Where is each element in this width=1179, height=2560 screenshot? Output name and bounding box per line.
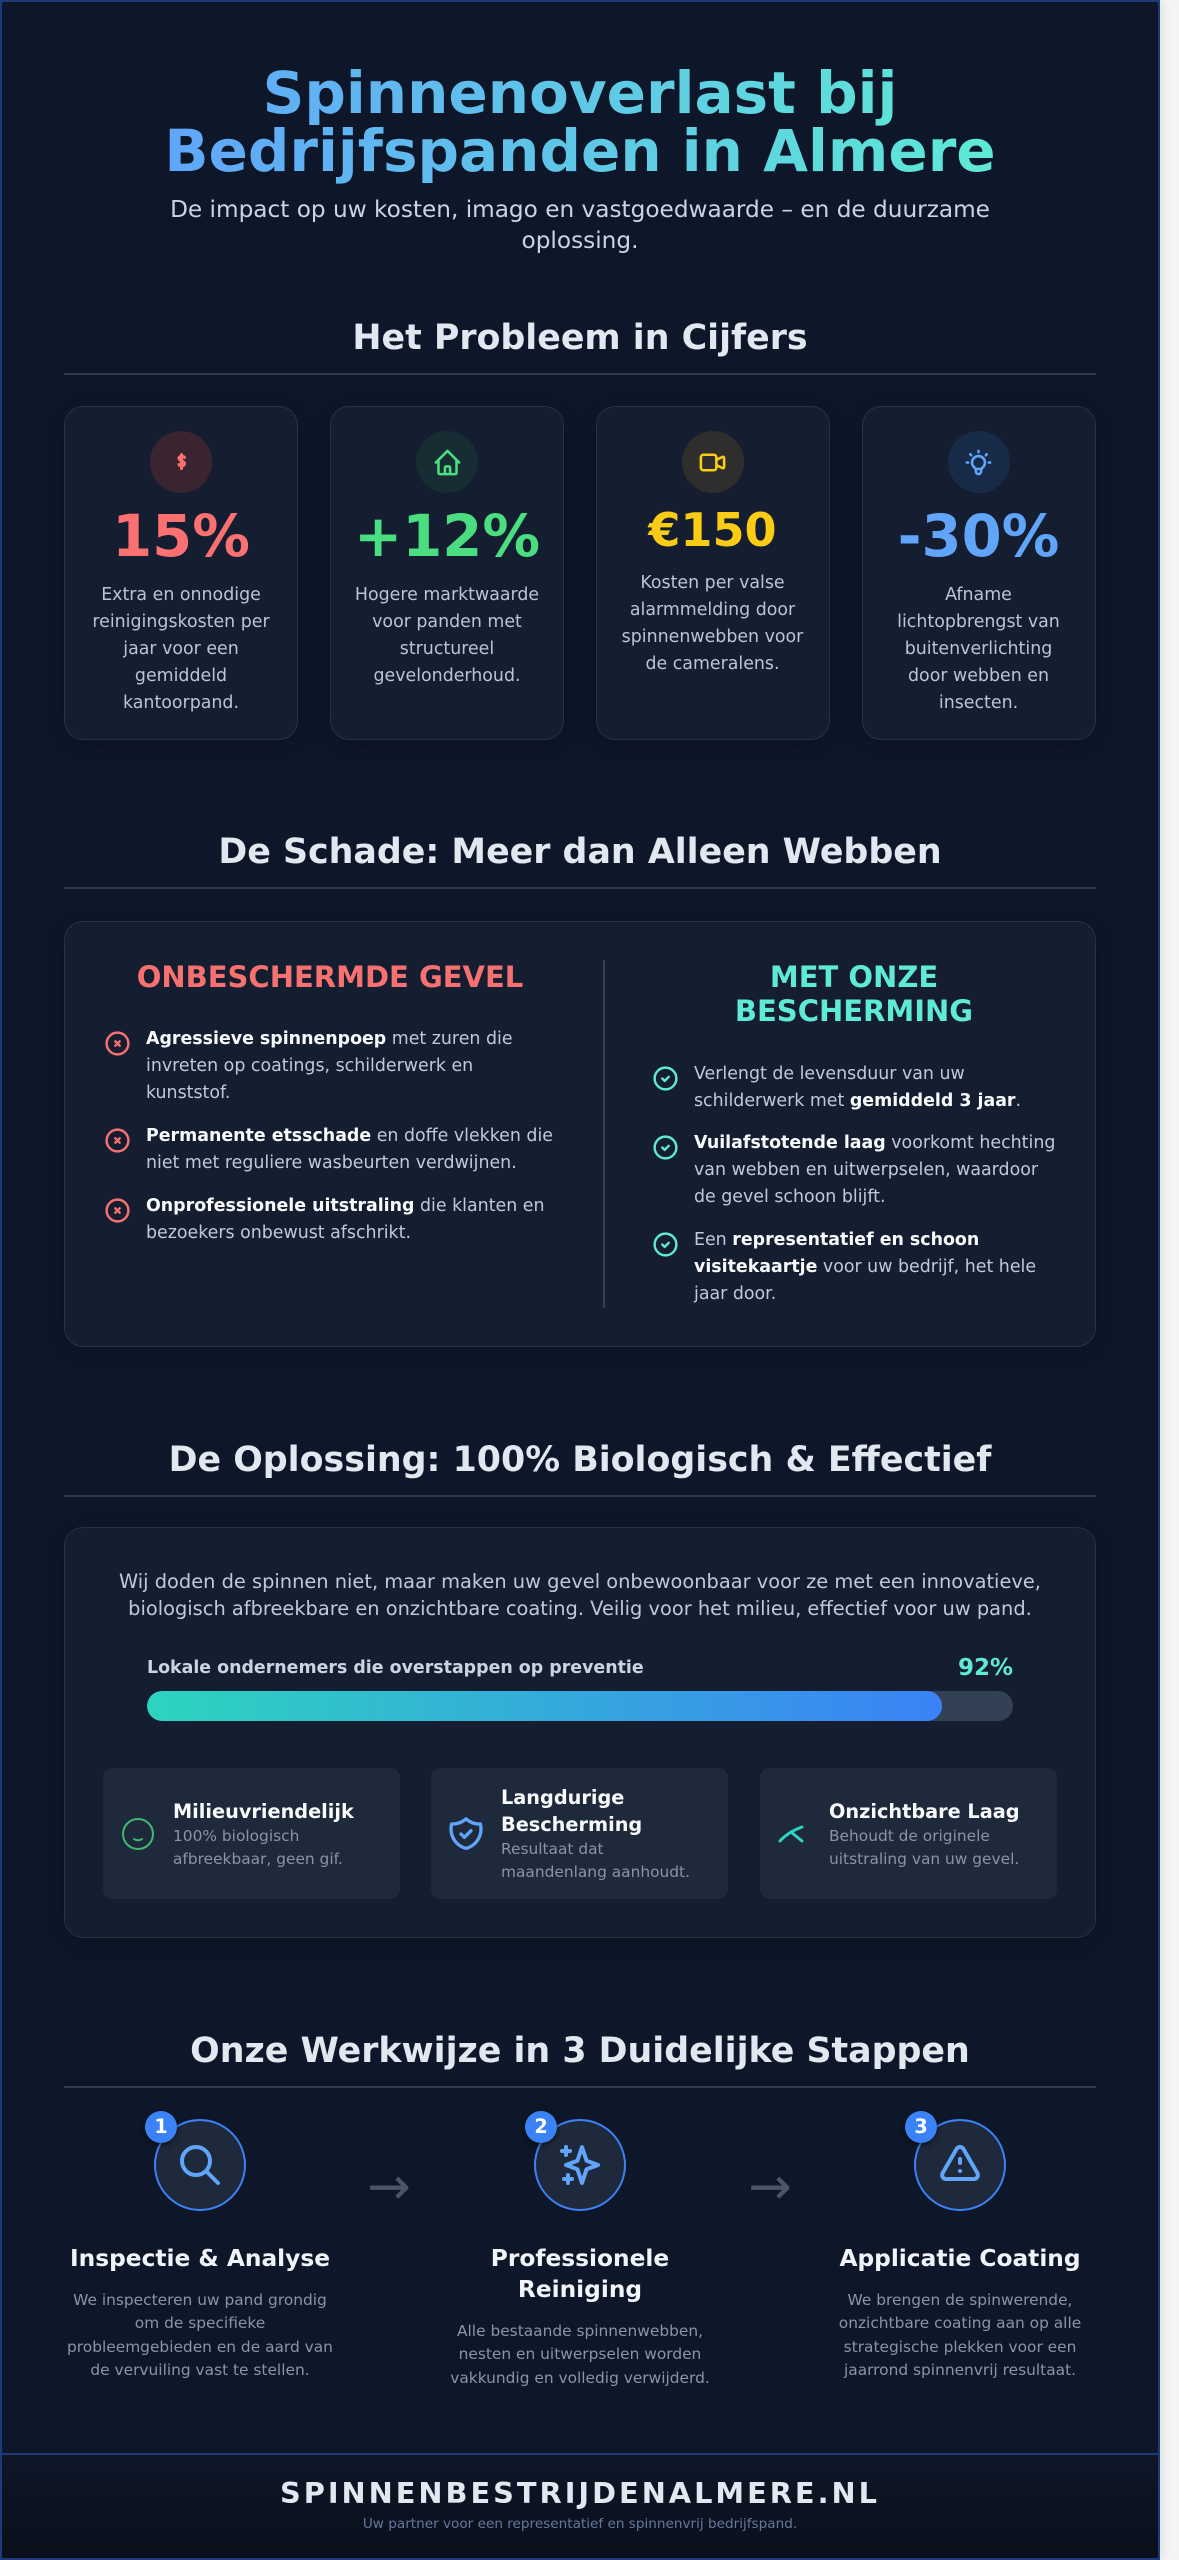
stat description: spinnenwebben voor [622,627,803,647]
step description: We brengen de spinwerende, [848,2291,1072,2309]
feature text: Langdurige [501,1786,624,1809]
subtitle: oplossing. [522,227,638,254]
stat description [355,585,539,686]
list item: visitekaartje: visitekaartje voor uw bedrijf, het hele [694,1257,1036,1277]
icon: home [416,431,478,493]
step description: vakkundig en volledig verwijderd. [450,2369,710,2387]
stat description [622,573,804,674]
list item: levensduur [653,1064,1021,1111]
intro text [119,1570,1041,1620]
stat description: Afname [945,585,1012,605]
icon: invisible layer [778,1826,804,1843]
stat description: gevelonderhoud. [373,666,521,686]
step number: 1 [154,2115,168,2138]
panel: stat card €150 [596,406,830,740]
stat description: voor panden met [372,612,522,632]
list item: uitstraling: Onprofessionele uitstraling die klanten en [146,1196,544,1216]
arrow: step 2 to 3: → [748,2157,792,2217]
feature text: afbreekbaar, geen gif. [173,1850,343,1868]
subtitle: De impact op uw kosten, imago en vastgoedwaarde – en de duurzame [170,196,990,223]
title: Spinnenoverlast bij [263,59,897,127]
step title: Applicatie Coating [839,2245,1081,2272]
step 2: reiniging [450,2111,710,2387]
list item: vuilafstotende laag: van webben en uitwerpselen, waardoor [694,1160,1038,1180]
progress value: 92% [958,1655,1013,1681]
step description: om de specifieke [135,2314,265,2332]
stat description: Hogere marktwaarde [355,585,539,605]
list item: vuilafstotende laag [653,1133,1055,1207]
feature text: Milieuvriendelijk [173,1800,354,1823]
progress track [147,1691,1013,1721]
list item: spinnenpoep: Agressieve spinnenpoep met zuren die [146,1029,513,1049]
stat description: insecten. [939,693,1018,713]
list item: etsschade: Permanente etsschade en doffe vlekken die [146,1126,553,1146]
step description [839,2291,1081,2379]
step description: nesten en uitwerpselen worden [459,2345,701,2363]
panel: stat card 15% [64,406,298,740]
stat description: de cameralens. [645,654,780,674]
footer brand: SPINNENBESTRIJDENALMERE.NL [280,2476,880,2510]
list item: levensduur: schilderwerk met gemiddeld 3 jaar. [694,1091,1021,1111]
intro text: Wij doden de spinnen niet, maar maken uw gevel onbewoonbaar voor ze met een innovatieve, [119,1570,1041,1593]
icon: shield [449,1817,483,1850]
list item: vuilafstotende laag: de gevel schoon blijft. [694,1187,886,1207]
list item: visitekaartje: Een representatief en schoon [694,1230,979,1250]
header: title and subtitle [164,59,996,254]
icon: dollar [150,431,212,493]
stat description: reinigingskosten per [92,612,270,632]
list item: visitekaartje: jaar door. [694,1284,776,1304]
feature text: Resultaat dat [501,1840,604,1858]
heading: De Oplossing: De Oplossing: 100% Biologisch & Effectief [169,1440,991,1480]
stat description: jaar voor een [123,639,239,659]
step title: Inspectie & Analyse [70,2245,330,2272]
footer [2,2453,1158,2558]
title: Bedrijfspanden in Almere [164,117,996,185]
step number: 2 [534,2115,548,2138]
icon: light bulb [948,431,1010,493]
list item: etsschade: niet met reguliere wasbeurten verdwijnen. [146,1153,517,1173]
stat description [897,585,1060,713]
stat number: +12% [354,503,540,570]
progress label: Lokale ondernemers die overstappen op preventie [147,1658,644,1678]
feature text: uitstraling van uw gevel. [829,1850,1019,1868]
stat description: Extra en onnodige [101,585,261,605]
column heading: met onze bescherming: MET ONZE [770,960,938,994]
step number: 3 [914,2115,928,2138]
heading: De Schade: De Schade: Meer dan Alleen Webben [218,832,942,872]
footer tagline: Uw partner voor een representatief en spinnenvrij bedrijfspand. [363,2516,797,2532]
step title: Reiniging [518,2276,642,2303]
step number [145,2111,177,2143]
feature text: Behoudt de originele [829,1827,990,1845]
step description: onzichtbare coating aan op alle [839,2314,1081,2332]
feature card: onzichtbare laag [760,1768,1057,1899]
step title: Professionele [491,2245,669,2272]
feature text: maandenlang aanhoudt. [501,1863,690,1881]
stat number: €150 [648,503,777,557]
panel: stat card -30% [862,406,1096,740]
list item: spinnenpoep: invreten op coatings, schilderwerk en [146,1056,473,1076]
column heading: met onze bescherming: BESCHERMING [735,994,973,1028]
step description: strategische plekken voor een [844,2338,1076,2356]
icon: sparkles [534,2119,626,2211]
step description: We inspecteren uw pand grondig [73,2291,327,2309]
stat description: door webben en [908,666,1049,686]
step description [450,2322,710,2387]
feature text [829,1800,1020,1868]
list item: levensduur: Verlengt de levensduur van uw [694,1064,965,1084]
title [160,64,1000,190]
list item: spinnenpoep [105,1029,513,1103]
list item: vuilafstotende laag: Vuilafstotende laag voorkomt hechting [694,1133,1055,1153]
step number [905,2111,937,2143]
progress fill [147,1691,942,1721]
heading: Onze Werkwijze: Onze Werkwijze in 3 Duidelijke Stappen [190,2031,970,2071]
panel: stat card +12% [330,406,564,740]
step description: de vervuiling vast te stellen. [90,2361,310,2379]
icon: search [154,2119,246,2211]
stat description: alarmmelding door [630,600,795,620]
stat description: kantoorpand. [123,693,239,713]
step number [525,2111,557,2143]
column heading: onbeschermde gevel: ONBESCHERMDE GEVEL [137,960,523,994]
feature text [173,1800,354,1868]
list item: uitstraling: bezoekers onbewust afschrikt. [146,1223,411,1243]
feature text: 100% biologisch [173,1827,299,1845]
panel: solution [64,1527,1096,1938]
stat number: 15% [112,503,250,570]
stat description: lichtopbrengst van [897,612,1060,632]
feature text: Onzichtbare Laag [829,1800,1020,1823]
step description: Alle bestaande spinnenwebben, [457,2322,703,2340]
panel: comparison [64,921,1096,1347]
stat description: buitenverlichting [905,639,1052,659]
subtitle [170,196,990,254]
step 1: inspectie [67,2111,333,2379]
icon: smile [122,1818,154,1850]
icon: video camera [682,431,744,493]
icon: warning triangle [914,2119,1006,2211]
heading: Het Probleem in Cijfers: Het Probleem in Cijfers [352,318,808,358]
stat number: -30% [898,503,1059,570]
list item: visitekaartje [653,1230,1036,1304]
stat description: Kosten per valse [640,573,785,593]
progress bar: 92% [147,1655,1013,1721]
arrow: step 1 to 2: → [367,2157,411,2217]
list item: etsschade [105,1126,553,1173]
stat description: gemiddeld [135,666,227,686]
step 3: coating [839,2111,1081,2379]
step description: probleemgebieden en de aard van [67,2338,333,2356]
feature text [501,1786,690,1881]
list item: uitstraling [105,1196,544,1243]
step description [67,2291,333,2379]
step description: jaarrond spinnenvrij resultaat. [844,2361,1076,2379]
feature text: Bescherming [501,1813,642,1836]
intro text: biologisch afbreekbare en onzichtbare coating. Veilig voor het milieu, effectief voor uw pand. [128,1597,1032,1620]
stat description [92,585,270,713]
list item: spinnenpoep: kunststof. [146,1083,230,1103]
feature card: milieuvriendelijk [103,1768,400,1899]
stat description: structureel [400,639,494,659]
feature card: langdurige bescherming [431,1768,728,1899]
step title [491,2245,669,2303]
column heading: met onze bescherming [735,960,973,1028]
